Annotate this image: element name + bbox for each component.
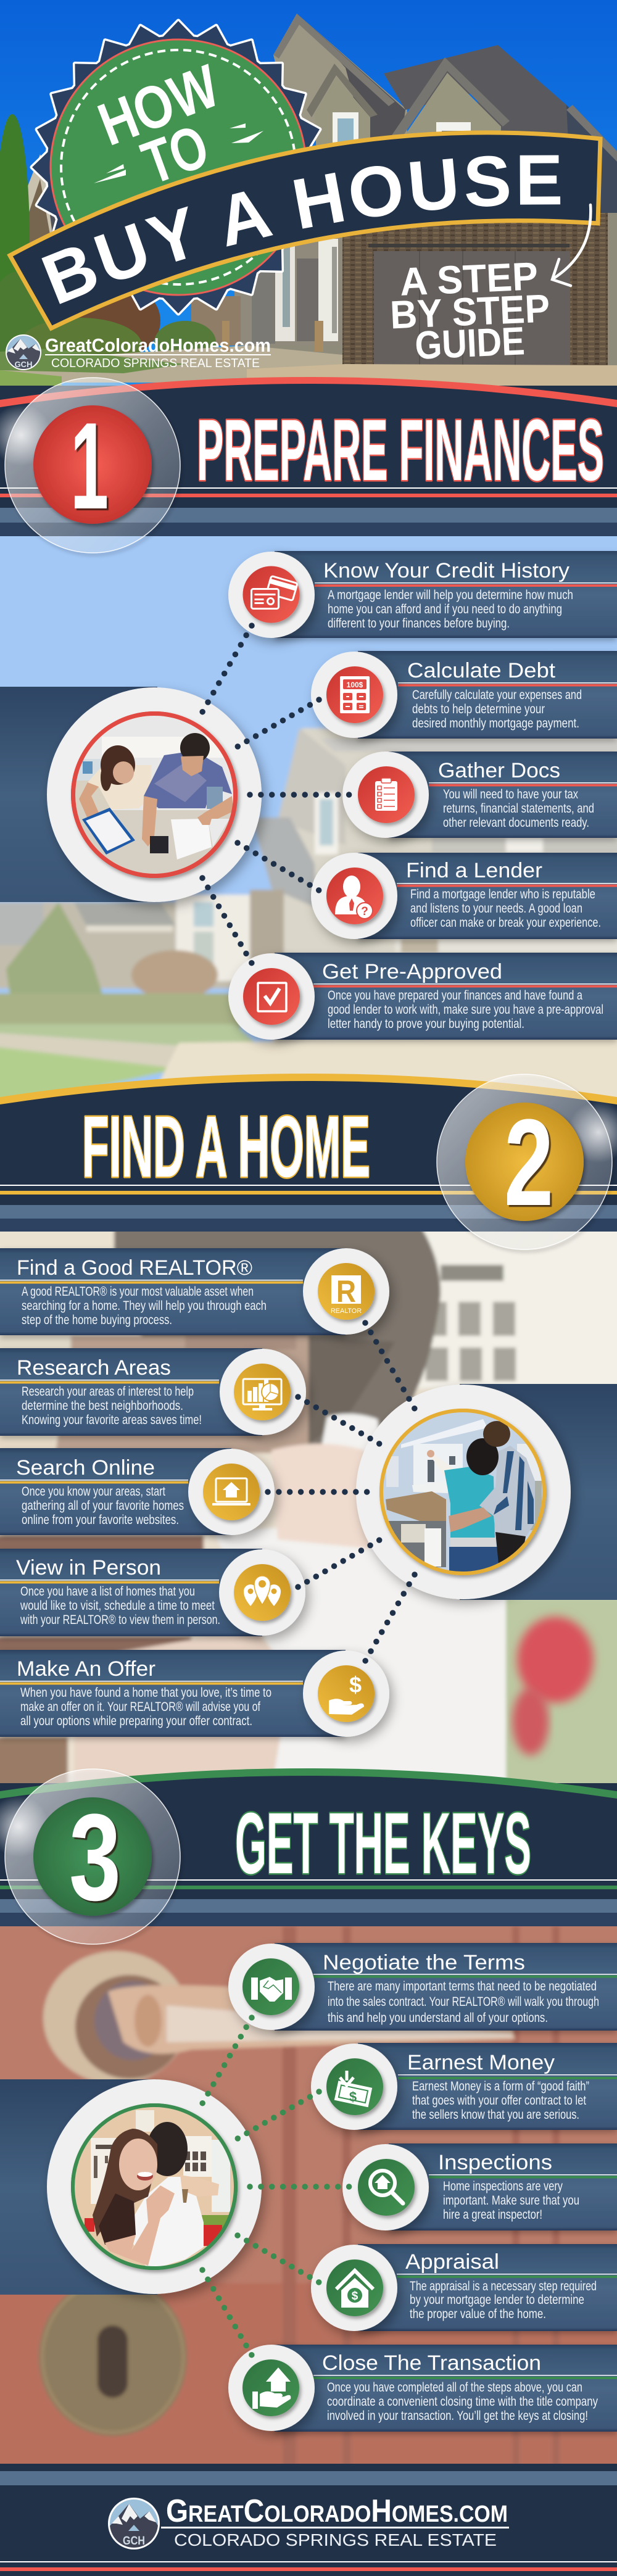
body text: this and help you understand all of your options.	[328, 2011, 548, 2025]
icon: laptop with house	[188, 1449, 275, 1535]
footer tagline: COLORADO SPRINGS REAL ESTATE	[174, 2530, 497, 2549]
body text	[328, 588, 573, 631]
panel: center photo couple doing finances	[0, 687, 262, 902]
icon: REALTOR R: REALTOR	[331, 1307, 362, 1315]
panel: center photo couple with keys	[0, 2079, 262, 2295]
body text: make an offer on it. Your REALTOR® will advise you of	[20, 1700, 260, 1714]
body text: You will need to have your tax	[443, 787, 578, 801]
icon: map pins	[219, 1549, 305, 1636]
icon: monitor with charts	[220, 1349, 306, 1435]
icon: checkbox	[228, 953, 315, 1040]
heading: Gather Docs	[438, 759, 560, 782]
number badge: 3: 3	[69, 1789, 121, 1926]
body text	[22, 1485, 184, 1527]
footer logo emblem: GCH	[123, 2535, 145, 2548]
body text	[20, 1686, 271, 1728]
heading: Get Pre-Approved	[322, 960, 502, 984]
body text: searching for a home. They will help you through each	[22, 1299, 267, 1313]
panel: Gather Docs	[342, 752, 617, 838]
section 2 header band	[0, 1074, 617, 1232]
body text: When you have found a home that you love, it’s time to	[20, 1686, 271, 1700]
section 1 background: house photo faded	[0, 521, 617, 1111]
heading: Appraisal	[405, 2250, 499, 2274]
body text: Research your areas of interest to help	[22, 1385, 194, 1399]
logo: GreatColoradoHomes small: GCH	[15, 360, 32, 369]
body text	[328, 988, 603, 1031]
heading: TO: TO	[133, 112, 217, 197]
icon: hand with dollar	[303, 1650, 389, 1737]
body text	[410, 2279, 597, 2321]
body text: different to your finances before buying.	[328, 616, 510, 631]
body text	[20, 1584, 220, 1627]
footer wordmark: GREATCOLORADOHOMES.COM	[166, 2493, 508, 2529]
body text	[412, 688, 582, 731]
number badge: 2: 2	[504, 1094, 553, 1232]
body text: Home inspections are very	[443, 2179, 563, 2193]
panel: Get Pre-Approved	[228, 953, 617, 1040]
body text: the proper value of the home.	[410, 2307, 546, 2321]
heading: Calculate Debt	[407, 659, 556, 682]
subtitle: A Step By Step Guide	[387, 253, 552, 368]
body text: Once you have a list of homes that you	[20, 1584, 195, 1599]
heading: Inspections	[438, 2151, 552, 2174]
number badge: 2	[437, 1074, 617, 1249]
body text	[410, 887, 601, 930]
panel: Make An Offer	[0, 1650, 389, 1737]
panel: Find a Good REALTOR	[0, 1248, 389, 1335]
icon: money with down arrow: $	[349, 2089, 357, 2105]
panel: Close The Transaction	[228, 2345, 617, 2432]
subtitle: A Step By Step Guide: GUIDE	[414, 318, 526, 368]
footer band	[0, 2464, 617, 2576]
icon: house with dollar: $	[352, 2290, 358, 2303]
section 1 header band	[0, 377, 617, 536]
body text: home you can afford and if you need to do anything	[328, 602, 562, 616]
badge: green starburst seal	[32, 21, 325, 313]
logo: GreatColoradoHomes small	[5, 334, 271, 371]
heading: Earnest Money	[407, 2051, 555, 2074]
heading: HOW: HOW	[89, 51, 228, 159]
body text: Once you know your areas, start	[22, 1485, 165, 1499]
connectors: section 3 dotted lines	[202, 2018, 349, 2355]
body text: with your REALTOR® to view them in person.	[20, 1613, 220, 1627]
heading: Research Areas	[17, 1356, 171, 1380]
icon: calculator: 100$	[347, 681, 363, 689]
body text: step of the home buying process.	[22, 1313, 172, 1327]
icon: money with down arrow	[311, 2044, 397, 2130]
icon: REALTOR R	[303, 1248, 389, 1335]
heading: Know Your Credit History	[323, 559, 569, 582]
icon: calculator	[311, 652, 397, 738]
footer logo emblem	[108, 2498, 160, 2549]
body text: gathering all of your favorite homes	[22, 1499, 184, 1513]
body text: determine the best neighborhoods.	[22, 1399, 183, 1413]
body text	[443, 787, 594, 830]
arrow: curved pointer to subtitle	[552, 205, 590, 286]
body text: desired monthly mortgage payment.	[412, 716, 579, 731]
panel: Find a Lender	[311, 853, 617, 939]
icon: hand holding house	[228, 2345, 315, 2431]
body text	[412, 2079, 589, 2122]
body text: important. Make sure that you	[443, 2193, 579, 2208]
number badge: 3	[0, 1769, 180, 1944]
panel: Know Your Credit History	[228, 551, 617, 638]
icon: handshake	[228, 1944, 315, 2030]
heading: Find a Lender	[406, 859, 542, 882]
logo tagline: COLORADO SPRINGS REAL ESTATE	[51, 357, 260, 370]
subtitle: A Step By Step Guide: A STEP	[399, 254, 539, 304]
logo wordmark: GreatColoradoHomes.com	[45, 334, 271, 356]
section 3 header band	[0, 1768, 617, 1926]
panel: Appraisal	[311, 2244, 617, 2331]
heading: Close The Transaction	[322, 2351, 541, 2375]
body text: A good REALTOR® is your most valuable asset when	[22, 1285, 254, 1299]
body text	[22, 1285, 267, 1327]
section 3 background: door with handle photo	[0, 1913, 617, 2474]
body text: debts to help determine your	[412, 702, 545, 716]
icon: magnifier with house	[342, 2144, 429, 2230]
body text: all your options while preparing your offer contract.	[20, 1714, 252, 1728]
panel: Inspections	[342, 2143, 617, 2230]
body text: online from your favorite websites.	[22, 1513, 179, 1527]
icon: clipboard checklist	[342, 752, 429, 838]
body text	[327, 2380, 598, 2423]
icon: REALTOR R: R	[336, 1274, 356, 1309]
body text: would like to visit, schedule a time to meet	[20, 1599, 215, 1613]
heading: Search Online	[16, 1456, 155, 1480]
heading: View in Person	[16, 1556, 161, 1580]
body text	[22, 1385, 202, 1427]
heading: Make An Offer	[17, 1657, 155, 1681]
heading: Find a Good REALTOR®	[17, 1256, 252, 1280]
subtitle: A Step By Step Guide: BY STEP	[389, 286, 551, 338]
panel: Research Areas	[0, 1348, 306, 1436]
connectors: section 1 dotted lines	[202, 626, 349, 963]
panel: Calculate Debt	[311, 651, 617, 739]
panel: View in Person	[0, 1549, 305, 1636]
panel: Search Online	[0, 1448, 275, 1535]
body text	[328, 1979, 599, 2025]
panel: center photo couple looking at home	[356, 1384, 617, 1600]
icon: credit cards	[228, 552, 315, 638]
connectors: section 2 dotted lines	[268, 1323, 415, 1661]
icon: lender with question mark: ?	[361, 905, 368, 918]
banner: BUY A HOUSE: BUY A HOUSE	[41, 155, 560, 304]
icon: house with dollar	[311, 2245, 397, 2331]
body text: letter handy to prove your buying potential.	[328, 1017, 524, 1031]
body text: Knowing your favorite areas saves time!	[22, 1413, 202, 1427]
icon: hand with dollar: $	[349, 1672, 362, 1697]
hero background: house photo	[0, 0, 617, 386]
body text	[443, 2179, 579, 2222]
icon: lender with question mark	[311, 853, 397, 939]
number badge: 1: 1	[70, 397, 109, 535]
decorative speed lines	[94, 123, 263, 183]
heading: Negotiate the Terms	[323, 1951, 525, 1974]
section 2 background: couple hugging photo faded	[0, 1222, 617, 1792]
panel: Earnest Money	[311, 2043, 617, 2130]
panel: Negotiate the Terms	[228, 1943, 617, 2031]
number badge: 1	[0, 378, 180, 553]
body text: hire a great inspector!	[443, 2208, 542, 2222]
